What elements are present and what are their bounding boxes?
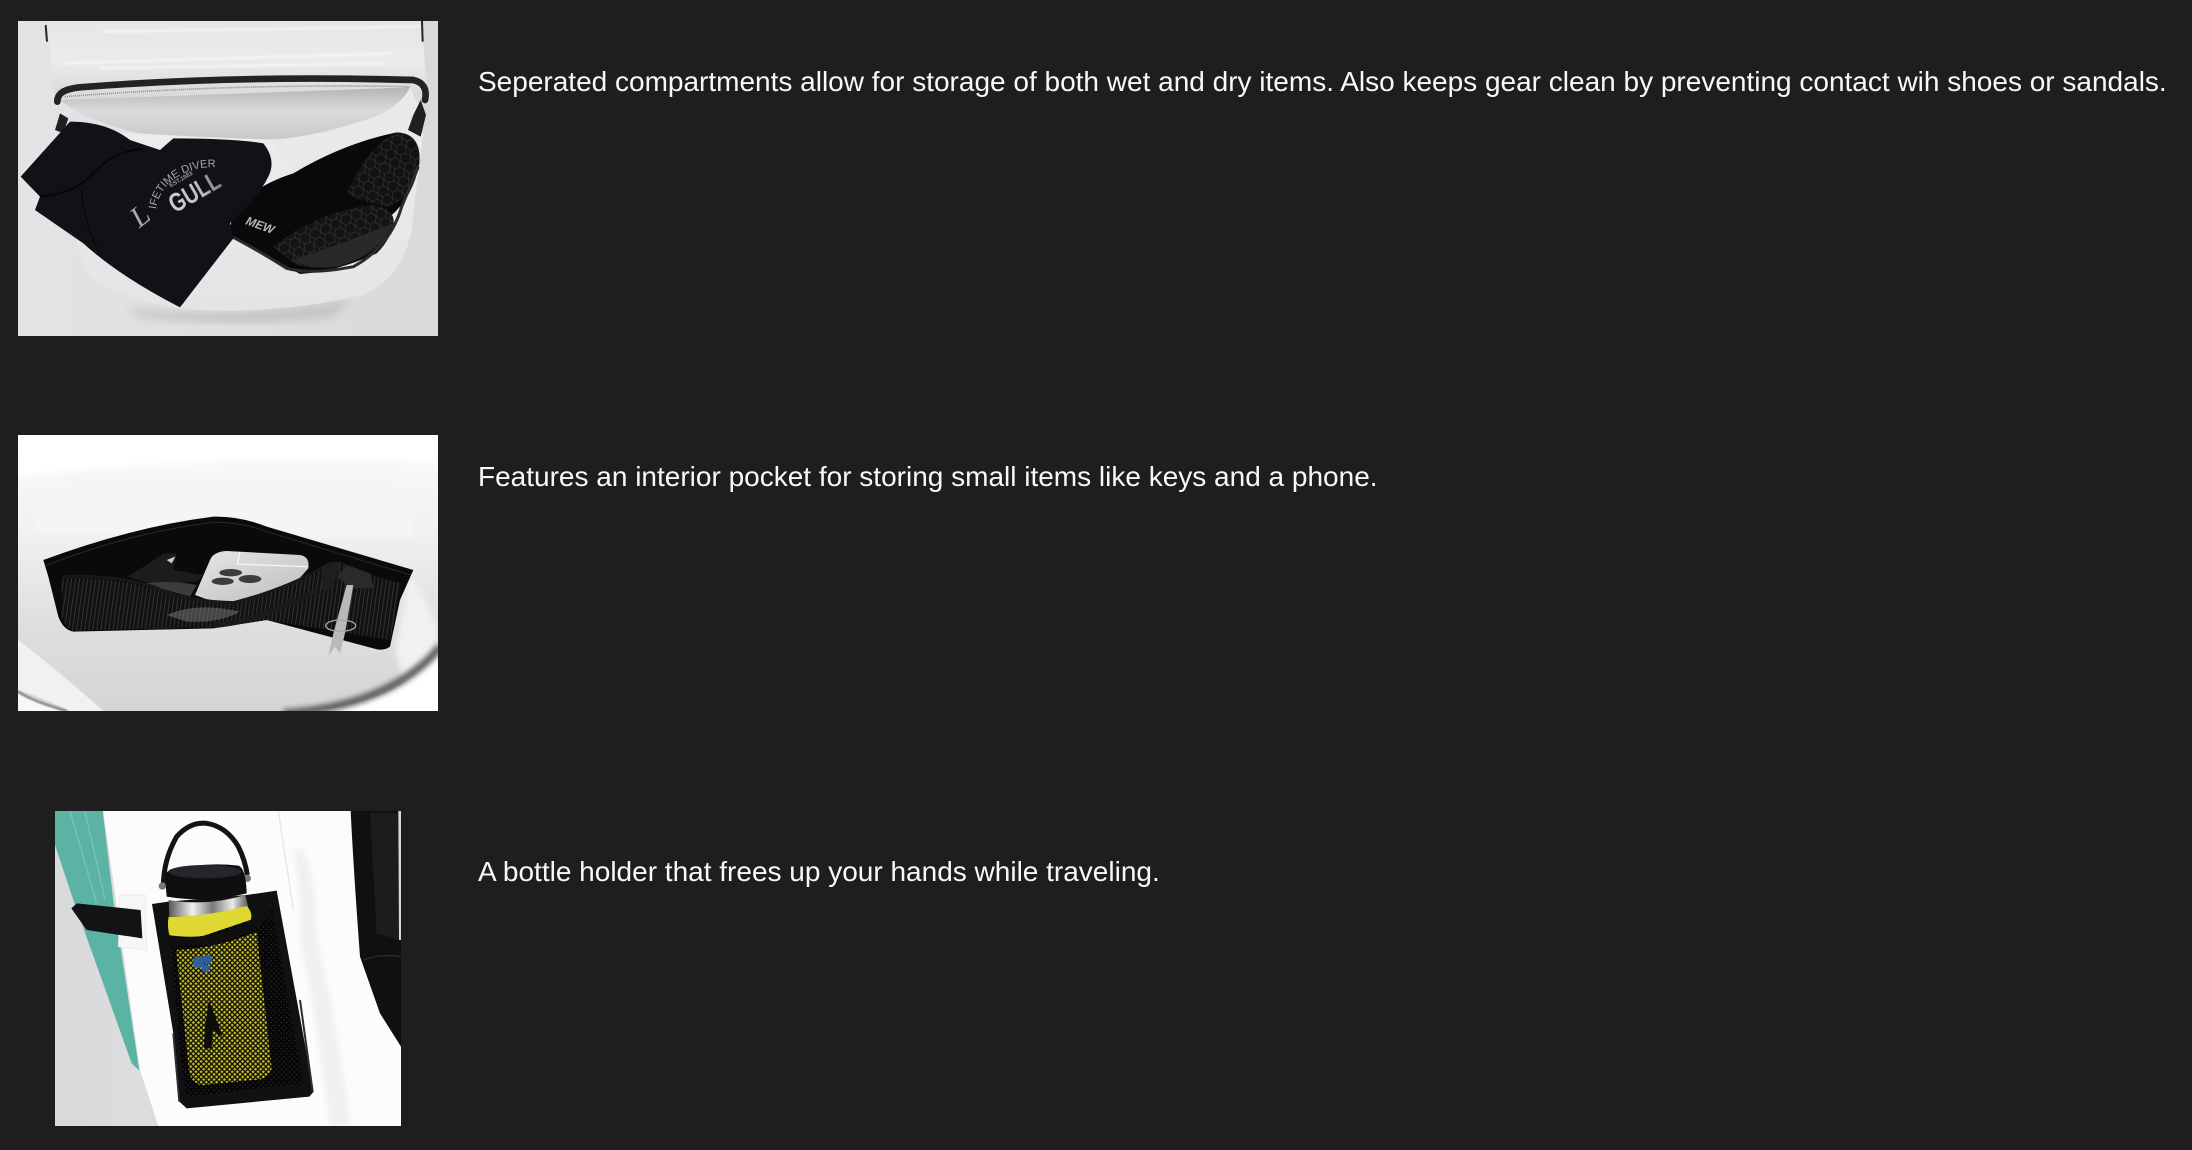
sunglasses in pocket (127, 553, 203, 585)
bag lower body (60, 133, 423, 311)
rim of the bag (18, 693, 63, 711)
black loop (118, 895, 147, 950)
pocket mesh (62, 562, 402, 640)
dark folded shirt (20, 122, 272, 308)
dark folded shirt: GULL (163, 165, 226, 219)
backpack straps on the right (351, 811, 401, 1047)
bottle handle (163, 823, 247, 887)
pocket (43, 517, 413, 650)
photo: interior pocket with phone and keys (18, 435, 438, 711)
shirt logo text: L (123, 199, 156, 234)
inner compartment lining (60, 87, 410, 139)
text: separated compartments: Seperated compartments allow for storage of both wet and dry items. Also keeps gear clean by preventing contact wih shoes or sandals. (478, 66, 2167, 97)
bag shadow on the table (127, 300, 350, 322)
teal strap (55, 811, 139, 1071)
shoe logo: MEW (244, 214, 278, 237)
background and white bag (55, 811, 401, 1126)
dark mesh side (172, 907, 303, 1097)
zipper rim (57, 79, 426, 102)
side buckles (408, 100, 426, 137)
text: interior pocket: Features an interior pocket for storing small items like keys and a phone. (478, 461, 1378, 492)
backdrop (18, 21, 438, 336)
phone (195, 551, 309, 602)
dark shoes (230, 132, 420, 274)
bottle (165, 864, 251, 938)
zipper and keys (322, 562, 373, 656)
bag upper flap (47, 21, 427, 100)
photo: bottle holder on side of bag (55, 811, 401, 1126)
bottle holder pocket back (152, 891, 314, 1108)
pocket hem (167, 912, 271, 941)
interior fabric (18, 435, 438, 711)
dark folded shirt: IFETIME DIVER (148, 160, 216, 208)
photo: open bag with wet and dry compartments (18, 21, 438, 336)
dark folded shirt: EST.1983 (169, 171, 195, 189)
bottle inside mesh (176, 932, 272, 1085)
shoe zipper (233, 167, 418, 271)
text: bottle holder: A bottle holder that frees up your hands while traveling. (478, 856, 1160, 887)
